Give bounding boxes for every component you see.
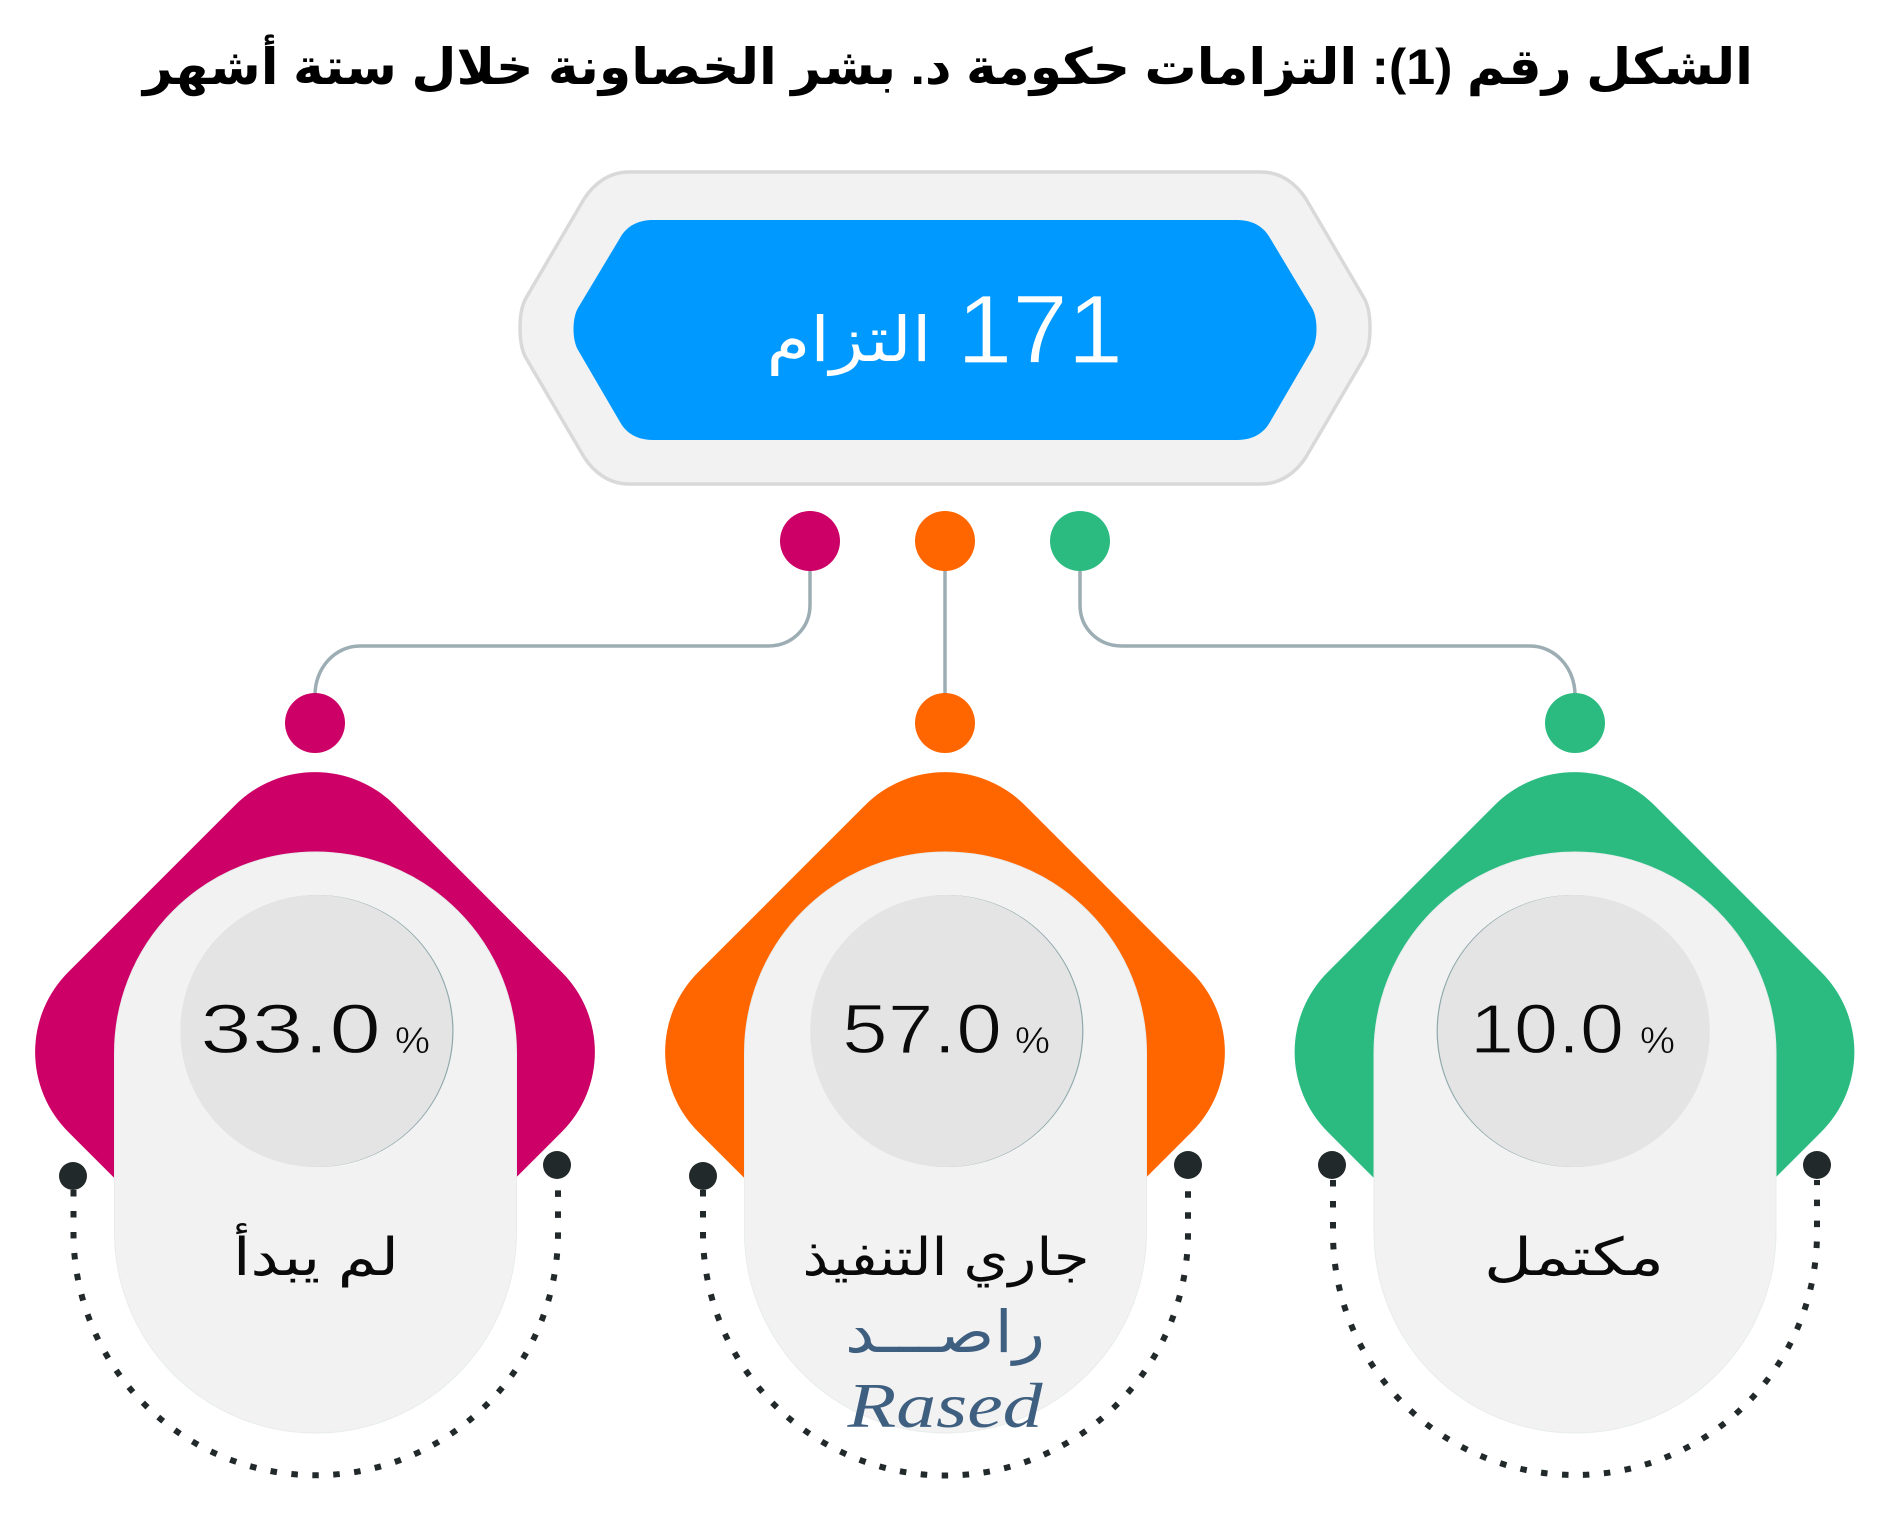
- arc end dots: [59, 1162, 87, 1190]
- percent sign: %: [1015, 1020, 1050, 1061]
- percent value: 10.0: [1470, 990, 1624, 1068]
- card: not started: [0, 725, 642, 1475]
- total number: 171: [957, 275, 1123, 384]
- percent sign: %: [395, 1020, 430, 1061]
- connector lines: [315, 570, 1575, 695]
- capsule: [1374, 852, 1776, 1433]
- percent circle: [180, 895, 454, 1167]
- arc end dots: [1318, 1151, 1346, 1179]
- connector dots: [285, 511, 1605, 753]
- diamond: [0, 725, 642, 1379]
- capsule: [114, 852, 516, 1433]
- dotted arc: [1333, 1180, 1817, 1475]
- watermark arabic: راصـــد: [845, 1300, 1045, 1366]
- diamond: [618, 725, 1272, 1379]
- capsule: [744, 852, 1146, 1433]
- label: لم يبدأ: [233, 1223, 399, 1288]
- card: completed: [1248, 725, 1890, 1475]
- watermark latin: Rased: [846, 1370, 1044, 1441]
- badge inner hexagon: [574, 220, 1316, 440]
- percent value: 57.0: [842, 990, 1002, 1068]
- dotted arc: [74, 1180, 558, 1475]
- percent sign: %: [1640, 1020, 1675, 1061]
- percent circle: [810, 895, 1083, 1167]
- percent circle: [1437, 895, 1710, 1167]
- arc end dots: [689, 1162, 717, 1190]
- total commitments badge: [520, 172, 1370, 484]
- dotted arc: [703, 1180, 1188, 1476]
- label: جاري التنفيذ: [802, 1229, 1090, 1288]
- badge outer hexagon: [520, 172, 1370, 484]
- title: الشكل رقم (1): التزامات حكومة د. بشر الخصاونة خلال ستة أشهر: [140, 34, 1753, 97]
- diamond: [1248, 725, 1890, 1379]
- percent value: 33.0: [200, 990, 381, 1068]
- card: in progress: [618, 725, 1272, 1476]
- label: مكتمل: [1484, 1229, 1664, 1287]
- total label: التزام: [766, 306, 932, 376]
